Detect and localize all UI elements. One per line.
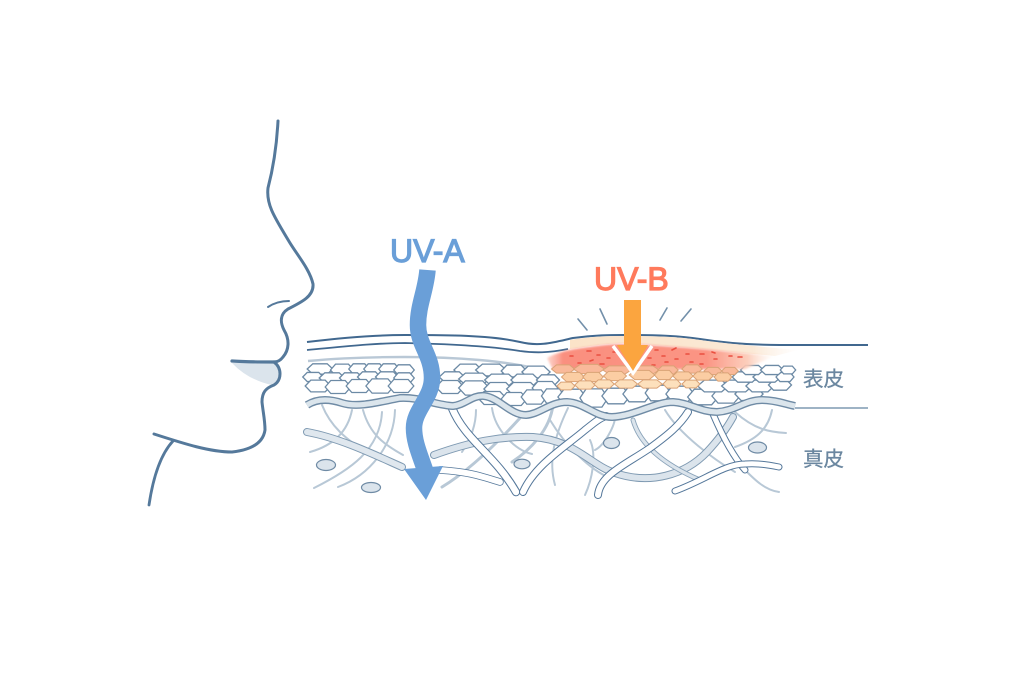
pale ribbon centre <box>434 417 733 478</box>
dermis label: 真皮 <box>803 448 844 471</box>
dermis cells <box>316 438 766 492</box>
skin surface lines <box>307 335 868 372</box>
epidermis cells <box>303 364 796 407</box>
nostril <box>268 301 289 307</box>
thin pale fibers <box>310 405 786 495</box>
outer surface line <box>307 335 868 345</box>
forehead, nose and chin outline <box>154 121 313 452</box>
pale ribbon right <box>633 420 700 480</box>
orange arrow <box>617 300 648 371</box>
middle cell block <box>436 364 565 406</box>
cream skin cells <box>551 364 738 390</box>
pale stratum line <box>308 357 550 372</box>
UV-B arrow <box>613 300 652 373</box>
impact rays <box>578 308 691 330</box>
dermis fibers <box>307 405 786 495</box>
second surface line <box>307 343 568 352</box>
right cell block <box>558 365 796 407</box>
epidermis label: 表皮 <box>803 368 844 391</box>
basement membrane wavy band <box>307 396 795 417</box>
UV-B label: UV-B <box>594 261 669 297</box>
lip shading <box>232 363 279 385</box>
layer divider line <box>795 407 868 409</box>
UV-A label: UV-A <box>390 233 465 269</box>
neck line <box>149 441 173 505</box>
face profile <box>149 121 313 505</box>
UV-B affected area <box>547 336 798 390</box>
white ribbons <box>440 408 779 495</box>
white arrow outline <box>613 346 652 373</box>
pale ribbon left <box>307 432 402 467</box>
UV-A arrow <box>404 270 443 500</box>
red inflamed zone <box>547 344 775 370</box>
left cell block <box>303 364 414 394</box>
red specks <box>570 348 742 365</box>
cream surface band <box>570 336 798 356</box>
upper lip line <box>232 361 276 362</box>
